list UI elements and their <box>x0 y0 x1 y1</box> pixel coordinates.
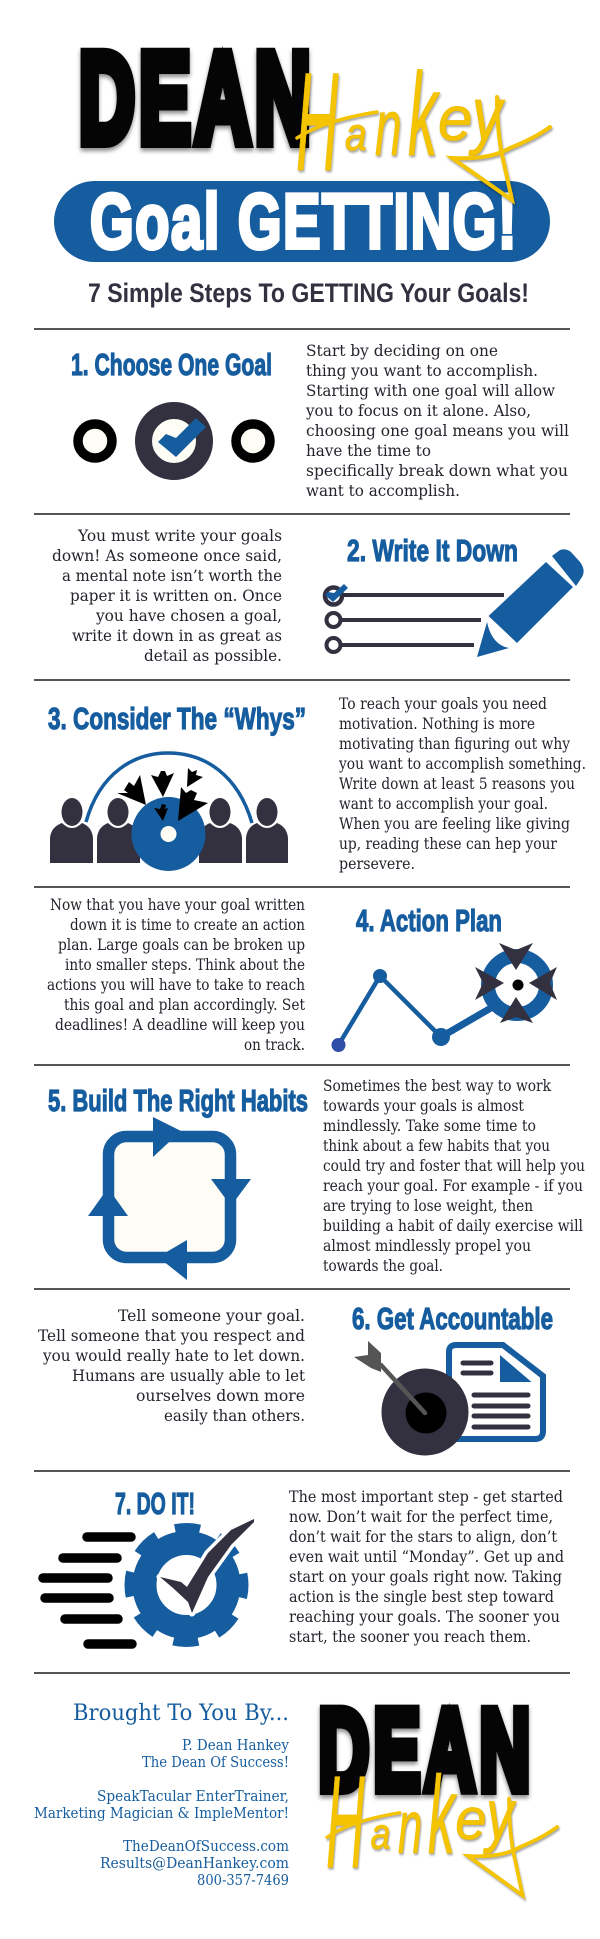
heading: step 3: 3. Consider The “Whys” <box>48 701 306 736</box>
logo: Dean Hankey header: k <box>408 49 440 180</box>
logo: Dean Hankey header: e <box>438 85 472 154</box>
icon: gear with check <box>130 1519 254 1642</box>
text block: step 6: Tell someone your goal. <box>118 1306 305 1325</box>
text block: step 2: down! As someone once said, <box>52 546 282 565</box>
text block: step 3: motivating than figuring out why <box>339 734 570 753</box>
text block: step 1: thing you want to accomplish. <box>306 361 538 380</box>
icon: people around a target <box>50 753 288 871</box>
text block: author name: P. Dean Hankey <box>182 1738 290 1754</box>
text block: step 4: this goal and plan accordingly. Set <box>64 995 305 1014</box>
subtitle: 7 Simple Steps To GETTING Your Goals! <box>88 278 529 308</box>
text block: step 6: ourselves down more <box>136 1386 305 1405</box>
logo: Dean Hankey footer: a <box>371 1810 390 1858</box>
text block: step 2: a mental note isn’t worth the <box>62 566 282 585</box>
logo: Dean Hankey footer: y <box>483 1776 517 1855</box>
text block: step 7: reaching your goals. The sooner you <box>289 1607 560 1626</box>
icon: target with dart <box>354 1341 468 1456</box>
text block: step 4: deadlines! A deadline will keep you <box>55 1015 305 1034</box>
text block: step 4: on track. <box>244 1035 305 1054</box>
text block: step 4: actions you will have to take to reach <box>47 975 305 994</box>
heading: step 1: 1. Choose One Goal <box>71 347 272 382</box>
text block: step 2: You must write your goals <box>77 526 282 545</box>
text block: step 1: want to accomplish. <box>306 481 460 500</box>
text block: step 3: motivation. Nothing is more <box>339 714 535 733</box>
text block: contact details: 800-357-7469 <box>197 1873 289 1889</box>
text block: step 2 <box>52 526 282 665</box>
icon: document <box>449 1345 543 1439</box>
text block: step 4: into smaller steps. Think about the <box>65 955 305 974</box>
text block: author titles: Marketing Magician & ImpleMentor! <box>34 1806 289 1822</box>
icon: checklist <box>325 584 504 652</box>
panel: step 7 do it <box>43 1486 564 1646</box>
text block: author titles: SpeakTacular EnterTrainer, <box>97 1789 289 1805</box>
panel: step 2 write it down <box>52 526 584 665</box>
text block: step 1: have the time to <box>306 441 431 460</box>
logo: Dean Hankey header: H <box>296 44 339 200</box>
text block: author name: The Dean Of Success! <box>142 1755 289 1771</box>
icon: pencil <box>477 549 584 657</box>
logo: Dean Hankey header: DEAN <box>79 27 315 170</box>
panel: step 5 build the right habits <box>48 1076 585 1280</box>
text block: step 7: don’t wait for the stars to align, don’t <box>289 1527 558 1546</box>
text block: step 1: choosing one goal means you will <box>306 421 569 440</box>
text block: step 7: action is the single best step toward <box>289 1587 554 1606</box>
text block: step 1: Start by deciding on one <box>306 341 498 360</box>
heading: step 5: 5. Build The Right Habits <box>48 1083 308 1118</box>
text block: step 5 <box>323 1076 585 1275</box>
text block: step 7: now. Don’t wait for the perfect time, <box>289 1507 553 1526</box>
logo: Dean Hankey header: a <box>345 109 367 161</box>
text block: step 2: paper it is written on. Once <box>70 586 282 605</box>
text block: step 3: persevere. <box>339 854 415 873</box>
logo: Dean Hankey footer: n <box>398 1786 422 1870</box>
text block: step 4 <box>47 895 305 1054</box>
text block: author name <box>142 1738 290 1771</box>
text block: step 2: you have chosen a goal, <box>95 606 282 625</box>
text block: step 7: even wait until “Monday”. Get up and <box>289 1547 564 1566</box>
panel: step 1 choose one goal <box>71 341 569 500</box>
text block: step 5: Sometimes the best way to work <box>323 1076 551 1095</box>
text block: step 5: think about a few habits that you <box>323 1136 550 1155</box>
heading: step 7: 7. DO IT! <box>115 1486 195 1521</box>
text block: step 7: start on your goals right now. Taking <box>289 1567 562 1586</box>
text block: step 3: want to accomplish your goal. <box>339 794 548 813</box>
text block: step 5: almost mindlessly propel you <box>323 1236 531 1255</box>
logo: Dean Hankey footer <box>318 1686 557 1896</box>
text block: step 4: down it is time to create an action <box>70 915 305 934</box>
logo: Dean Hankey footer: e <box>455 1787 487 1852</box>
logo: Dean Hankey header: y <box>468 74 506 157</box>
text block: step 5: towards the goal. <box>323 1256 443 1275</box>
text block: step 3: up, reading these can hep your <box>339 834 557 853</box>
text block: step 5: towards your goals is almost <box>323 1096 524 1115</box>
logo: Dean Hankey header <box>79 27 550 200</box>
text block: step 4: Now that you have your goal written <box>50 895 305 914</box>
icon: habit cycle arrows <box>88 1117 251 1280</box>
logo: Dean Hankey footer: H <box>326 1749 365 1896</box>
text block: step 3: When you are feeling like giving <box>339 814 570 833</box>
text block: step 1: specifically break down what you <box>306 461 568 480</box>
heading: step 2: 2. Write It Down <box>347 533 518 568</box>
text block: contact details: TheDeanOfSuccess.com <box>123 1839 289 1855</box>
text block: step 1: Starting with one goal will allow <box>306 381 555 400</box>
text block: step 6: Tell someone that you respect and <box>38 1326 305 1345</box>
text block: step 6: you would really hate to let down. <box>42 1346 305 1365</box>
icon: speed lines <box>43 1537 132 1644</box>
text block: step 5: are trying to lose weight, then <box>323 1196 533 1215</box>
icon: three rings with check <box>78 410 270 472</box>
text block: step 6 <box>38 1306 306 1425</box>
text block: step 3: To reach your goals you need <box>339 694 547 713</box>
text block: contact details <box>100 1839 289 1889</box>
panel: step 4 action plan <box>47 895 557 1054</box>
text block: step 2: detail as possible. <box>144 646 282 665</box>
logo: Dean Hankey header: n <box>375 82 402 172</box>
text block: step 4: plan. Large goals can be broken up <box>58 935 305 954</box>
text block: step 6: Humans are usually able to let <box>72 1366 306 1385</box>
text block: step 7 <box>289 1487 564 1646</box>
text block: step 7: start, the sooner you reach them. <box>289 1627 531 1646</box>
panel: footer credits <box>34 1686 557 1896</box>
text block: contact details: Results@DeanHankey.com <box>100 1856 289 1872</box>
text block: step 6: easily than others. <box>164 1406 305 1425</box>
text block: step 1 <box>305 341 569 500</box>
chart: path line to target <box>332 943 557 1052</box>
text block: author titles <box>34 1789 289 1822</box>
panel: step 3 consider the whys <box>48 694 586 873</box>
text block: step 1: you to focus on it alone. Also, <box>305 401 531 420</box>
text block: step 2: write it down in as great as <box>72 626 282 645</box>
text block: step 3 <box>338 694 586 873</box>
text block: step 7: The most important step - get started <box>289 1487 563 1506</box>
heading: step 4: 4. Action Plan <box>356 903 502 938</box>
text block: step 5: mindlessly. Take some time to <box>323 1116 536 1135</box>
heading: brought to you by: Brought To You By... <box>73 1700 289 1726</box>
logo: Dean Hankey footer: k <box>428 1754 458 1877</box>
panel: step 6 get accountable <box>38 1301 553 1456</box>
